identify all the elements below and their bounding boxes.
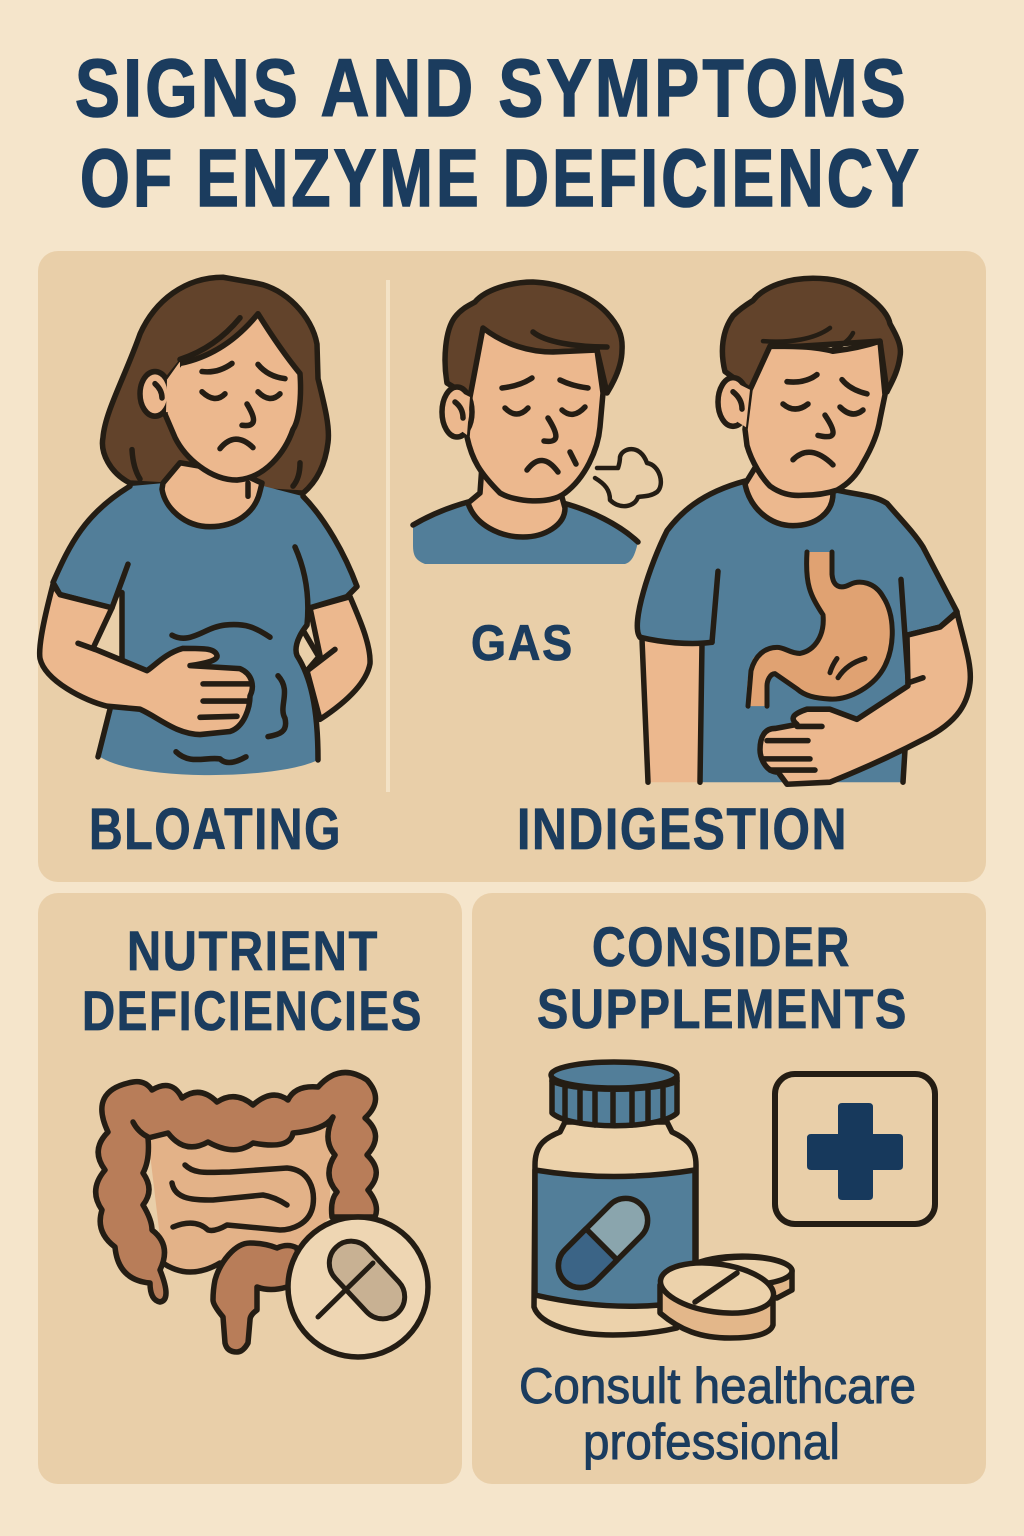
text: consult healthcare professional: Consult healthcare	[519, 1358, 916, 1414]
text: consult healthcare professional	[519, 1358, 916, 1470]
heading: nutrient deficiencies: DEFICIENCIES	[82, 979, 423, 1042]
title	[75, 43, 922, 224]
heading: nutrient deficiencies: NUTRIENT	[127, 919, 379, 982]
icon: crossed-out pill	[288, 1217, 428, 1357]
icon: gas cloud	[595, 449, 661, 506]
panel: nutrient deficiencies	[38, 893, 462, 1484]
heading: nutrient deficiencies	[82, 919, 423, 1042]
heading: consider supplements: SUPPLEMENTS	[537, 977, 908, 1040]
label: indigestion: INDIGESTION	[517, 797, 848, 862]
label: gas: GAS	[471, 615, 574, 671]
illustration: man with indigestion	[637, 278, 970, 784]
panel: consider supplements	[472, 893, 986, 1484]
panel: top symptoms	[38, 251, 986, 882]
heading: consider supplements	[537, 915, 908, 1040]
label: bloating: BLOATING	[89, 797, 342, 862]
text: consult healthcare professional: professional	[583, 1414, 840, 1470]
illustration: intestines with crossed pill	[96, 1072, 428, 1357]
illustration: tablets	[657, 1256, 792, 1338]
icon: medical cross	[775, 1074, 935, 1224]
illustration: woman with bloating	[40, 277, 370, 775]
heading: consider supplements: CONSIDER	[592, 915, 851, 978]
icon: stomach	[747, 552, 893, 706]
illustration: man with gas	[413, 282, 661, 564]
illustration: supplement bottle	[534, 1062, 696, 1335]
